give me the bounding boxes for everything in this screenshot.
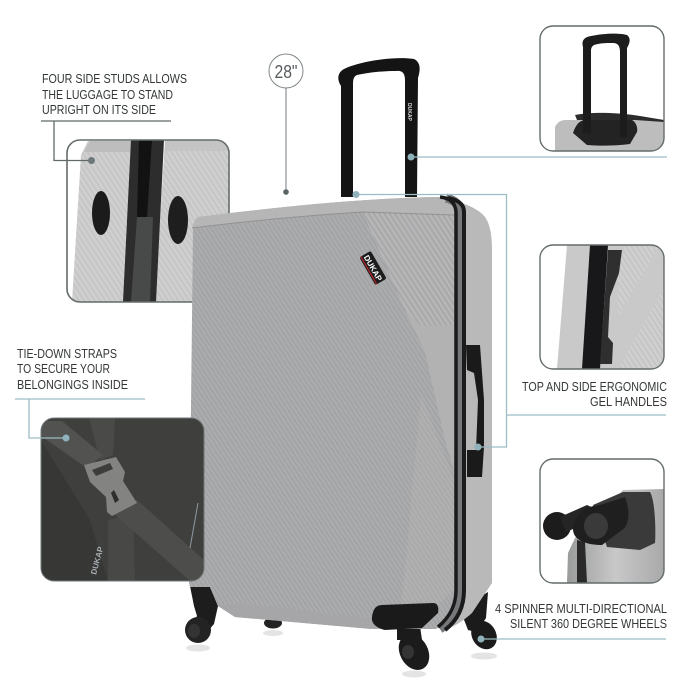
- inset: handle: [540, 26, 664, 151]
- marker dot: [88, 157, 95, 164]
- lower diagonal panel: [402, 395, 454, 603]
- handle logo: DUKAP: [406, 103, 412, 121]
- zipper outer line: [445, 198, 464, 630]
- top marker dot: [352, 191, 360, 198]
- size text: 28": [274, 61, 298, 82]
- bottom shade: [218, 603, 376, 629]
- callout text: GEL HANDLES: [590, 394, 667, 409]
- callout: tie-down straps: [15, 346, 145, 442]
- side panel: [446, 199, 492, 629]
- suitcase: [185, 58, 502, 675]
- callout text: [42, 71, 187, 117]
- callout text: FOUR SIDE STUDS ALLOWS: [42, 71, 187, 86]
- callout: side studs: [41, 71, 187, 164]
- front face: [189, 197, 456, 629]
- corner guard: [372, 603, 438, 630]
- inset: side studs: [67, 140, 229, 302]
- callout text: 4 SPINNER MULTI-DIRECTIONAL: [495, 601, 667, 616]
- callout text: [522, 379, 667, 409]
- marker dot: [62, 434, 70, 442]
- callout: gel handles: [352, 191, 667, 450]
- callout text: TO SECURE YOUR: [17, 361, 110, 376]
- callout text: UPRIGHT ON ITS SIDE: [42, 102, 156, 117]
- size badge: [269, 54, 303, 195]
- callout text: [495, 601, 667, 631]
- inset: tie-down straps: [41, 418, 204, 581]
- top bevel: [192, 197, 454, 228]
- leader line: [411, 156, 667, 158]
- inset: wheels: [540, 459, 664, 583]
- callout: spinner wheels: [478, 601, 667, 642]
- callout text: [17, 346, 128, 392]
- wheel shadows: [186, 630, 497, 678]
- logo badge: DUKAP: [362, 254, 384, 283]
- callout text: TOP AND SIDE ERGONOMIC: [522, 379, 667, 394]
- callout text: THE LUGGAGE TO STAND: [42, 87, 173, 102]
- bevel edge: [192, 212, 454, 228]
- side handle: [466, 345, 484, 477]
- telescopic handle: [338, 58, 420, 197]
- logo badge: [359, 251, 387, 285]
- size dot: [283, 189, 289, 195]
- size circle: [269, 54, 303, 88]
- marker dot: [408, 154, 414, 160]
- callout: telescopic handle: [408, 154, 667, 160]
- upper diagonal panel: [363, 207, 454, 460]
- leader line: [481, 638, 666, 640]
- zipper inner line: [438, 197, 456, 627]
- size line: [285, 88, 287, 192]
- inset: side handle: [540, 245, 664, 369]
- marker dot: [478, 636, 484, 642]
- leader line: [15, 399, 145, 438]
- callout text: BELONGINGS INSIDE: [17, 377, 128, 392]
- leader line: [41, 121, 171, 160]
- callout text: SILENT 360 DEGREE WHEELS: [510, 616, 667, 631]
- smooth diagonal band: [405, 310, 454, 470]
- wheels: [185, 586, 502, 675]
- side marker dot: [474, 444, 482, 450]
- inset: tie-down straps: DUKAP: [89, 545, 105, 576]
- leader lines: [356, 194, 666, 447]
- callout text: TIE-DOWN STRAPS: [17, 346, 117, 361]
- zipper band: [440, 198, 460, 629]
